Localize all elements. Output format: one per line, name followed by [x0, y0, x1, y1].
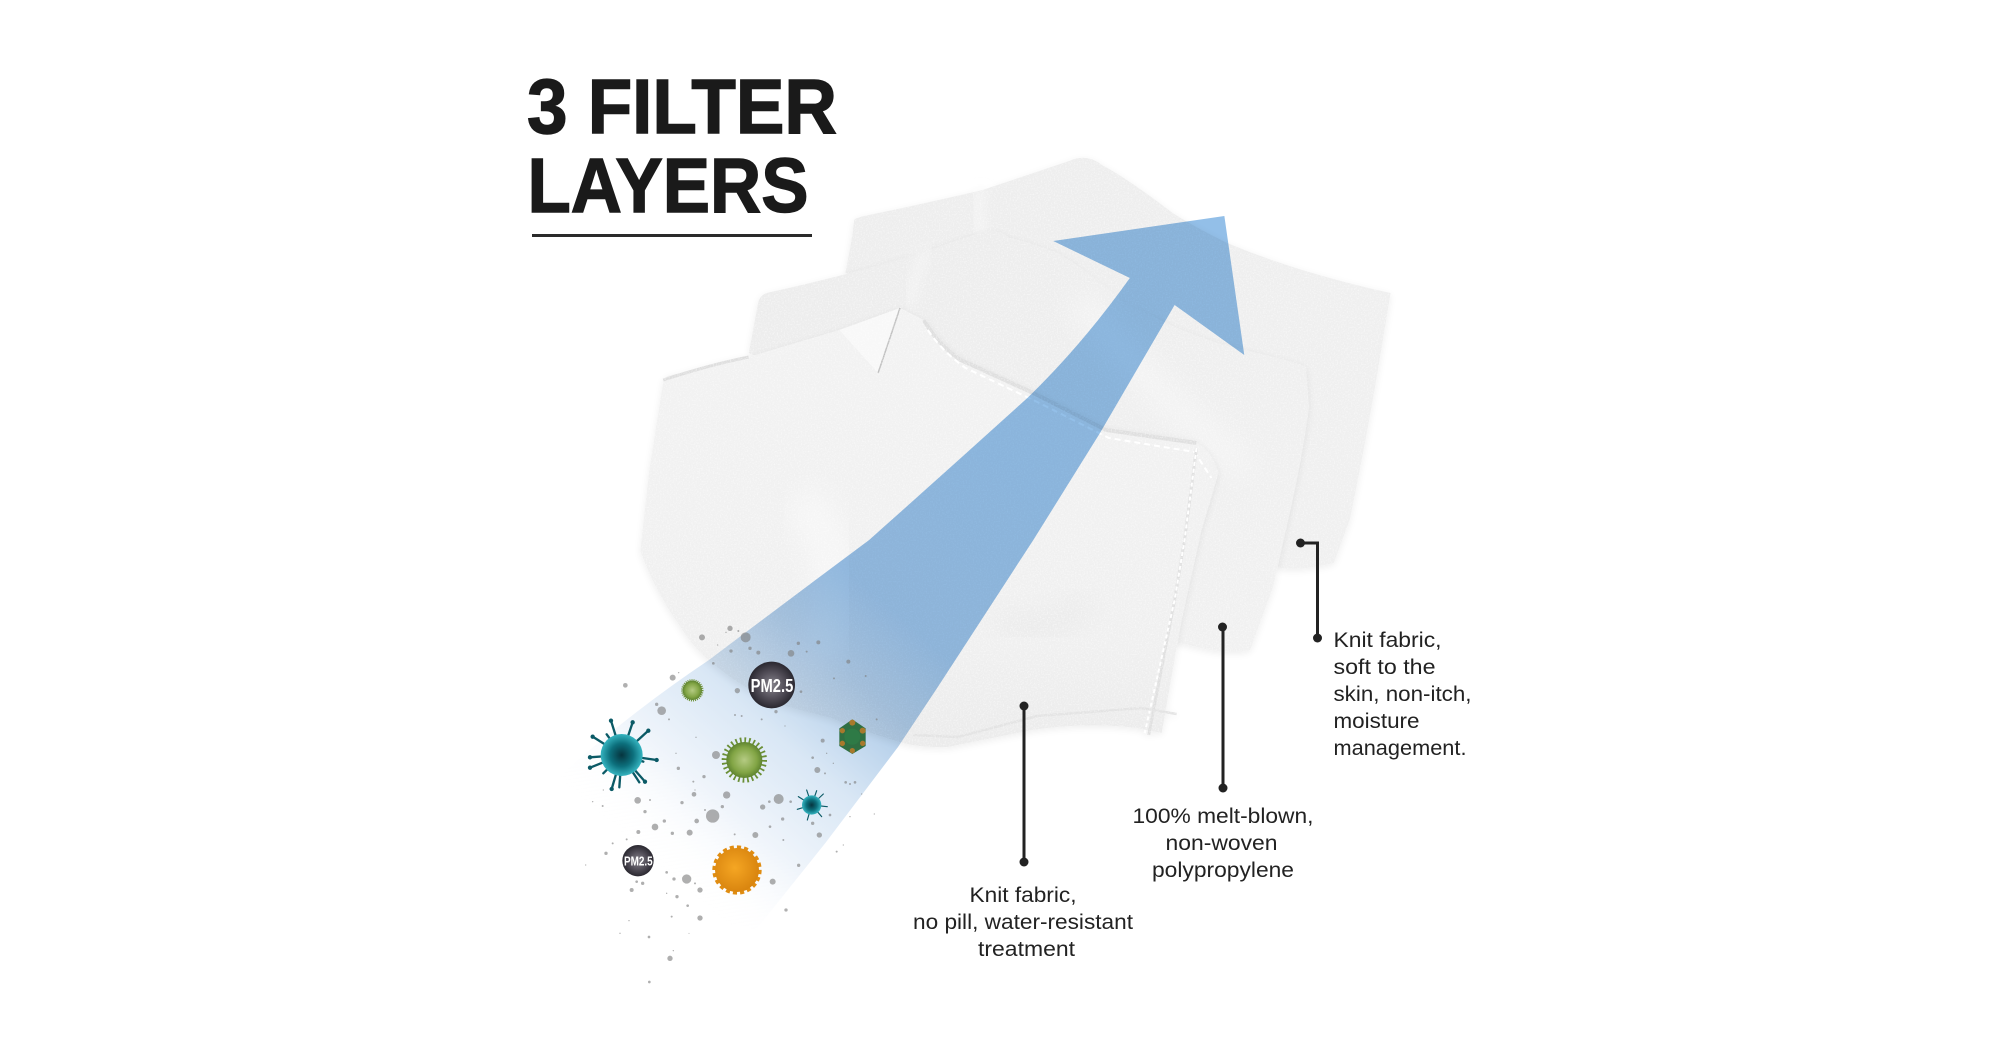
dust particles [585, 626, 878, 983]
mask: front layer [640, 308, 1218, 747]
text: middle layer description: non-woven [1166, 832, 1278, 855]
icon: orange coronavirus [715, 848, 759, 892]
callout: outer layer [1296, 538, 1472, 760]
title: 3 FILTER [527, 64, 837, 150]
text: outer layer description: skin, non-itch, [1334, 683, 1472, 706]
icon: small PM2.5 particle: PM2.5 [624, 854, 653, 869]
blue airflow arrow with fading beam [545, 216, 1244, 930]
illustration: three stacked masks [640, 158, 1391, 747]
text: middle layer description: polypropylene [1152, 859, 1294, 882]
mask: back layer [845, 158, 1391, 569]
title underline [532, 234, 812, 237]
text: middle layer description [1132, 805, 1314, 882]
text: outer layer description [1334, 629, 1472, 760]
text: front layer description: Knit fabric, [970, 884, 1076, 907]
text: middle layer description: 100% melt-blown, [1132, 805, 1314, 828]
callout: middle layer [1132, 622, 1314, 882]
callout: front layer [913, 702, 1133, 961]
icon: small green pollen [682, 680, 702, 700]
leader line: front layer [1020, 702, 1028, 866]
leader line: outer layer [1296, 538, 1322, 642]
icon: large PM2.5 particle: PM2.5 [751, 675, 793, 696]
icon: hexagonal green virus [839, 719, 866, 754]
icon: small PM2.5 particle [622, 845, 654, 876]
mask: middle layer [749, 231, 1309, 652]
icon: large PM2.5 particle [748, 662, 795, 708]
title: LAYERS [528, 143, 808, 229]
leader line: middle layer [1218, 622, 1228, 792]
particles and pathogens [585, 626, 878, 983]
text: outer layer description: management. [1334, 737, 1466, 760]
icon: small teal virus [797, 790, 827, 820]
icon: large teal virus [589, 720, 658, 790]
text: front layer description [913, 884, 1133, 961]
text: outer layer description: Knit fabric, [1334, 629, 1442, 652]
text: front layer description: treatment [978, 938, 1075, 961]
text: front layer description: no pill, water-resistant [913, 911, 1133, 934]
icon: large green pollen [725, 741, 764, 779]
text: outer layer description: moisture [1334, 710, 1420, 733]
text: outer layer description: soft to the [1334, 656, 1436, 679]
title [527, 64, 837, 229]
